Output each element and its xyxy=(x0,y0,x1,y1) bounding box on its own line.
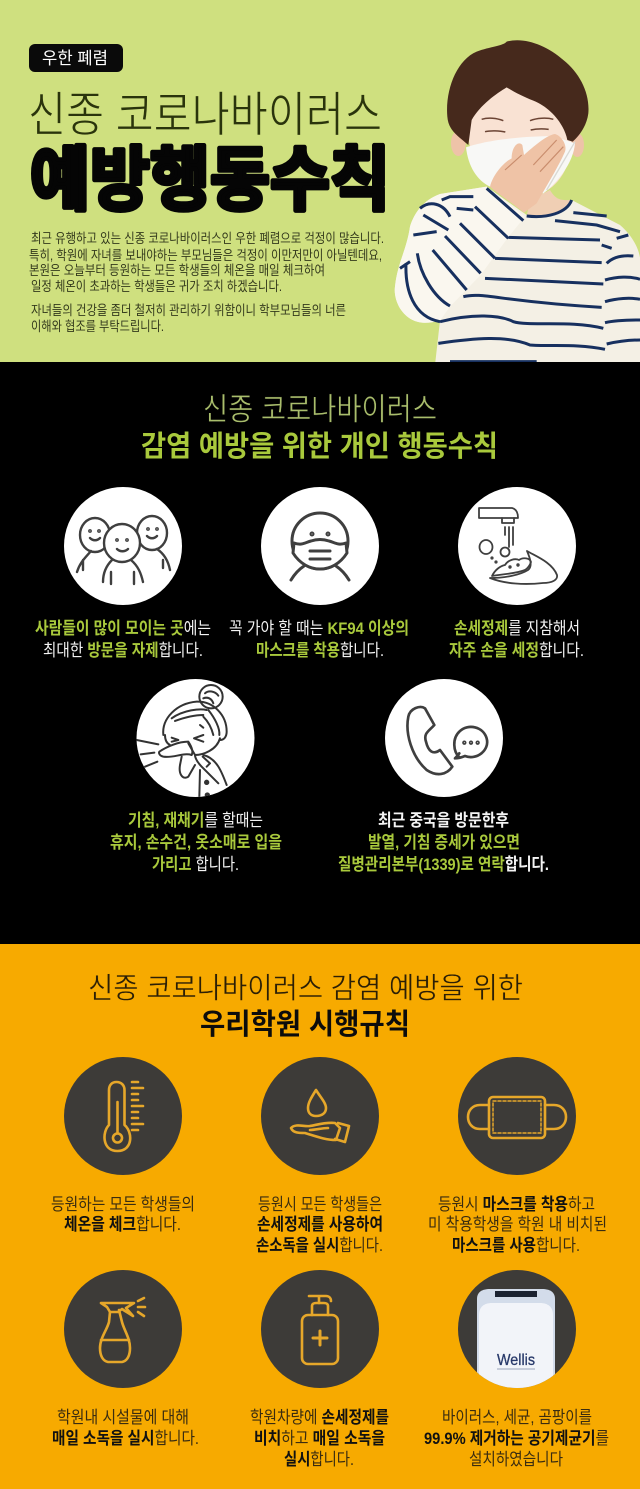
tag: 우한 폐렴 xyxy=(29,44,123,72)
rule: wear mask xyxy=(428,1057,607,1255)
intro paragraph: 이해와 협조를 부탁드립니다. xyxy=(31,319,164,334)
caption: 매일 소독을 실시합니다. xyxy=(52,1429,199,1448)
rule: sanitizer in vehicles xyxy=(250,1270,389,1469)
caption xyxy=(428,1195,607,1255)
caption: 마스크를 착용합니다. xyxy=(256,641,384,660)
caption: 등원시 모든 학생들은 xyxy=(258,1195,382,1214)
caption: 비치하고 매일 소독을 xyxy=(254,1429,385,1448)
caption xyxy=(52,1408,199,1448)
caption: 휴지, 손수건, 옷소매로 입을 xyxy=(110,833,282,852)
intro paragraph: 특히, 학원에 자녀를 보내야하는 부모님들은 걱정이 이만저만이 아닐텐데요, xyxy=(29,248,382,263)
caption xyxy=(51,1195,195,1234)
icon: three people xyxy=(77,516,170,584)
caption: 99.9% 제거하는 공기제균기를 xyxy=(424,1429,609,1448)
item: call the hotline xyxy=(338,679,549,874)
caption: 등원하는 모든 학생들의 xyxy=(51,1195,195,1214)
rule: temperature check xyxy=(51,1057,195,1234)
heading: 신종 코로나바이러스 감염 예방을 위한: 신종 코로나바이러스 감염 예방을 위한 xyxy=(88,972,523,1005)
caption: 체온을 체크합니다. xyxy=(64,1215,181,1234)
tag: 우한 폐렴: 우한 폐렴 xyxy=(42,49,108,68)
caption xyxy=(250,1408,389,1469)
rule: sanitize hands xyxy=(256,1057,383,1255)
icon: pump bottle with plus xyxy=(302,1296,338,1364)
caption: 설치하였습니다 xyxy=(469,1450,563,1469)
caption: 학원차량에 손세정제를 xyxy=(250,1408,389,1427)
photo: Wellis air purifier: Wellis xyxy=(497,1352,535,1369)
icon: woman sneezing xyxy=(137,685,227,797)
intro paragraph xyxy=(29,231,384,334)
caption: 손세정제를 사용하여 xyxy=(257,1215,383,1234)
photo: boy coughing with a mask xyxy=(395,40,640,365)
caption: 기침, 재채기를 할때는 xyxy=(128,811,263,830)
icon: mask xyxy=(468,1097,566,1138)
photo: Wellis air purifier xyxy=(477,1289,555,1388)
panel: personal guidelines xyxy=(35,394,583,874)
item: avoid crowds xyxy=(35,487,211,660)
title: 예방행동수칙: 예방행동수칙 xyxy=(30,141,390,219)
heading: 감염 예방을 위한 개인 행동수칙: 감염 예방을 위한 개인 행동수칙 xyxy=(141,430,498,463)
item: cover coughs and sneezes xyxy=(110,679,282,874)
icon: faucet and hand xyxy=(479,508,557,584)
caption: 미 착용학생을 학원 내 비치된 xyxy=(428,1215,607,1234)
panel: academy rules xyxy=(0,944,640,1489)
caption xyxy=(449,619,584,660)
caption: 등원시 마스크를 착용하고 xyxy=(438,1195,595,1214)
rule: disinfect facilities xyxy=(52,1270,199,1448)
caption: 마스크를 사용합니다. xyxy=(452,1236,580,1255)
intro paragraph: 본원은 오늘부터 등원하는 모든 학생들의 체온을 매일 체크하여 xyxy=(29,263,325,278)
caption xyxy=(256,1195,383,1255)
caption: 손세정제를 지참해서 xyxy=(454,619,580,638)
icon: spray bottle xyxy=(100,1298,145,1362)
caption xyxy=(424,1408,609,1469)
caption: 꼭 가야 할 때는 KF94 이상의 xyxy=(229,619,409,638)
caption: 사람들이 많이 모이는 곳에는 xyxy=(35,619,211,638)
caption: 자주 손을 세정합니다. xyxy=(449,641,584,660)
caption: 실시합니다. xyxy=(284,1450,354,1469)
caption: 최대한 방문을 자제합니다. xyxy=(43,641,203,660)
icon: thermometer xyxy=(105,1082,143,1151)
caption: 손소독을 실시합니다. xyxy=(256,1236,383,1255)
intro paragraph: 일정 체온이 초과하는 학생들은 귀가 조치 하겠습니다. xyxy=(31,279,282,294)
heading: 우리학원 시행규칙: 우리학원 시행규칙 xyxy=(200,1008,410,1041)
intro paragraph: 최근 유행하고 있는 신종 코로나바이러스인 우한 폐렴으로 걱정이 많습니다. xyxy=(31,231,384,246)
caption: 질병관리본부(1339)로 연락합니다. xyxy=(338,855,549,874)
caption xyxy=(338,811,549,874)
caption xyxy=(229,619,409,660)
heading: 신종 코로나바이러스: 신종 코로나바이러스 xyxy=(203,392,437,427)
icon: droplet over hand xyxy=(291,1090,349,1142)
rule: air purifier xyxy=(424,1270,609,1469)
caption: 발열, 기침 증세가 있으면 xyxy=(368,833,520,852)
caption: 최근 중국을 방문한후 xyxy=(378,811,509,830)
caption: 가리고 합니다. xyxy=(152,855,239,874)
title: 신종 코로나바이러스: 신종 코로나바이러스 xyxy=(28,89,382,142)
panel: intro header xyxy=(0,0,640,365)
item: hand sanitizer xyxy=(449,487,584,660)
caption xyxy=(110,811,282,874)
intro paragraph: 자녀들의 건강을 좀더 철저히 관리하기 위함이니 학부모님들의 너른 xyxy=(31,303,346,318)
caption: 학원내 시설물에 대해 xyxy=(57,1408,189,1427)
icon: face with mask xyxy=(291,513,349,580)
caption xyxy=(35,619,211,660)
caption: 바이러스, 세균, 곰팡이를 xyxy=(442,1408,592,1427)
icon: phone and speech bubble xyxy=(407,707,487,774)
item: wear a mask xyxy=(229,487,409,660)
